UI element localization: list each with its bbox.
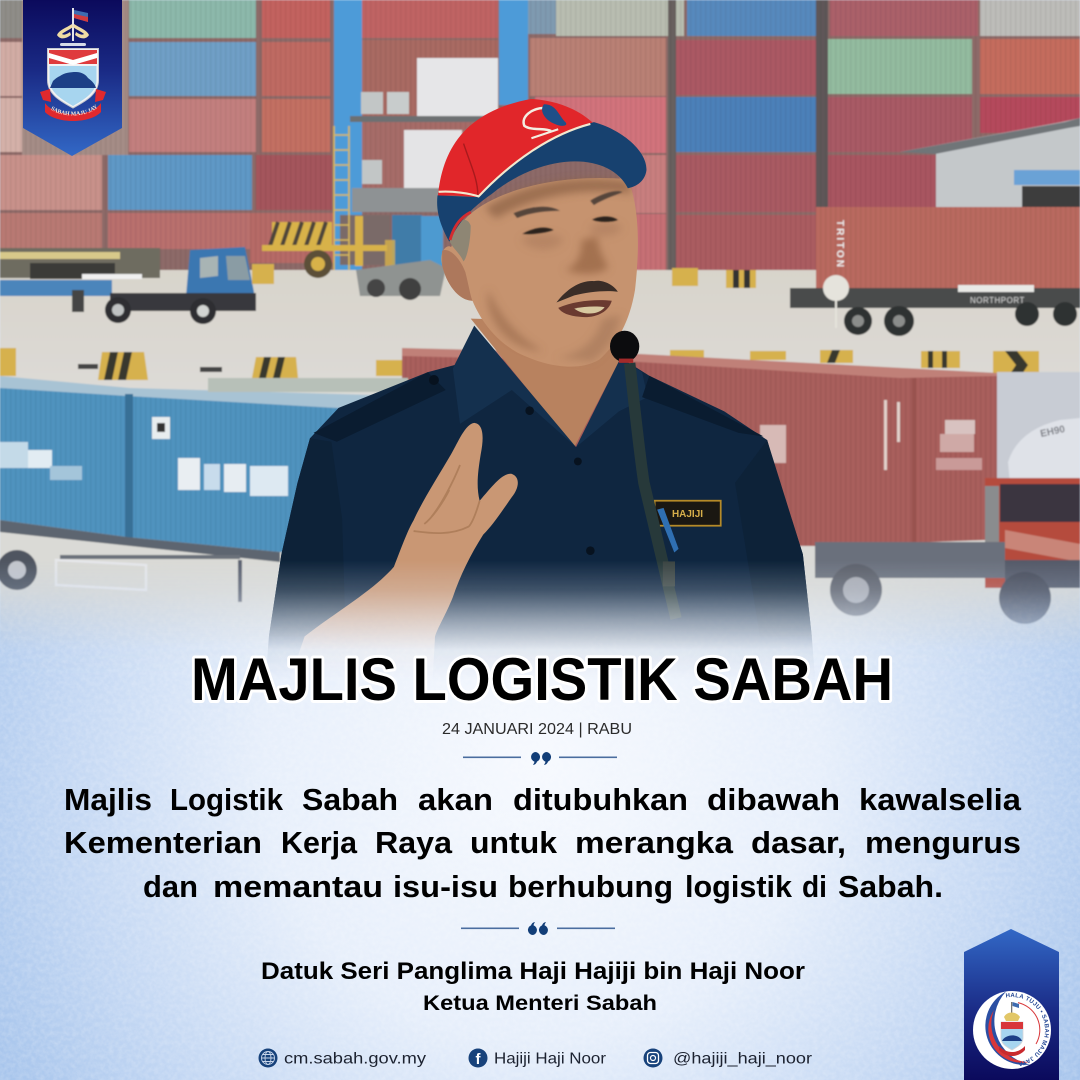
line 1: Logistik: [170, 782, 284, 817]
icon: instagram: [644, 1048, 662, 1068]
raised hand: [281, 423, 518, 704]
website: cm.sabah.gov.my: [284, 1050, 426, 1068]
warehouse: [900, 118, 1080, 208]
eyebrows and eyes: [514, 191, 622, 234]
line 3: logistik: [685, 869, 793, 904]
top quote ornament: [463, 752, 617, 765]
bottom-right banner with round emblem: [964, 929, 1059, 1080]
bottom quote ornament: [461, 922, 615, 935]
shirt details: [269, 326, 812, 636]
bottom paper panel fading over photo: [0, 560, 1080, 1080]
line 2: dasar,: [751, 825, 846, 860]
TRITON red container on trailer: NORTHPORT: [970, 296, 1025, 305]
attribution name: Datuk Seri Panglima Haji Hajiji bin Haji Noor: [261, 958, 805, 985]
instagram handle: @hajiji_haji_noor: [673, 1050, 813, 1068]
crane legs and white boxes: [334, 0, 528, 275]
icon: facebook: [468, 1048, 488, 1068]
face shading: [485, 179, 631, 361]
icon: shield: [48, 48, 98, 108]
neck: [471, 319, 621, 447]
line 3: Sabah.: [838, 869, 943, 904]
cap piping: [439, 124, 590, 196]
cap crown: [438, 99, 594, 197]
right-hand ground and white deflector: EH90: [1039, 424, 1067, 440]
icon: facebook: f: [476, 1051, 482, 1068]
red container foreground: [402, 348, 997, 546]
yard barriers: [0, 264, 1039, 380]
line 2: Raya: [375, 825, 453, 860]
yellow gantry machine: [262, 216, 395, 278]
microphone: [610, 331, 676, 619]
line 1: dibawah: [707, 782, 840, 817]
foreground red truck: [815, 478, 1080, 624]
blue container trailer: [0, 520, 280, 602]
line 2: merangka: [575, 825, 734, 860]
ground: [0, 270, 1080, 390]
line 1: ditubuhkan: [513, 782, 688, 817]
icon: flag and crossed arms: [57, 8, 89, 46]
blue containers foreground: [0, 376, 408, 560]
shirt: [264, 326, 817, 704]
line 1: akan: [418, 782, 493, 817]
grey hair and ear: [442, 220, 472, 301]
portrait: speaker with cap and microphone: [264, 99, 817, 704]
quote body text: [64, 782, 1022, 904]
line 1: Majlis: [64, 782, 152, 817]
cap brim: [437, 122, 646, 242]
line 2: untuk: [470, 825, 558, 860]
moustache and mouth: [556, 281, 618, 317]
line 3: isu-isu: [393, 869, 498, 904]
line 3: berhubung: [508, 869, 673, 904]
line 3: memantau: [213, 869, 383, 904]
name badge: HAJIJI: [672, 509, 703, 520]
icon: globe: [258, 1048, 278, 1068]
name badge: [655, 501, 721, 552]
line 2: Kementerian: [64, 825, 262, 860]
line 2: mengurus: [865, 825, 1021, 860]
cap logo: [524, 104, 566, 138]
emblem disc: [973, 991, 1051, 1069]
attribution role: Ketua Menteri Sabah: [423, 992, 657, 1015]
top-left banner with state crest: [23, 0, 122, 156]
line 2: Kerja: [281, 825, 358, 860]
face: [441, 178, 638, 367]
emblem disc: HALA TUJU • SABAH MAJU JAYA: [1006, 992, 1050, 1066]
container stacks: [0, 0, 1080, 272]
facebook name: Hajiji Haji Noor: [494, 1050, 607, 1068]
line 3: di: [802, 869, 827, 904]
TRITON red container on trailer: TRITON: [834, 220, 845, 269]
title: MAJLIS LOGISTIK SABAH: [191, 646, 893, 713]
date line: 24 JANUARI 2024 | RABU: [442, 721, 632, 738]
small crest: [999, 1002, 1025, 1056]
line 1: Sabah: [302, 782, 398, 817]
line 1: kawalselia: [859, 782, 1022, 817]
line 3: dan: [143, 869, 198, 904]
finger shading: [414, 465, 480, 533]
icon: motto scroll: [40, 89, 106, 121]
small grey tractor: [356, 260, 446, 300]
right-hand ground and white deflector: [997, 372, 1080, 492]
TRITON red container on trailer: [790, 207, 1080, 336]
footer social links: [258, 1048, 813, 1068]
blue truck: [0, 247, 256, 324]
